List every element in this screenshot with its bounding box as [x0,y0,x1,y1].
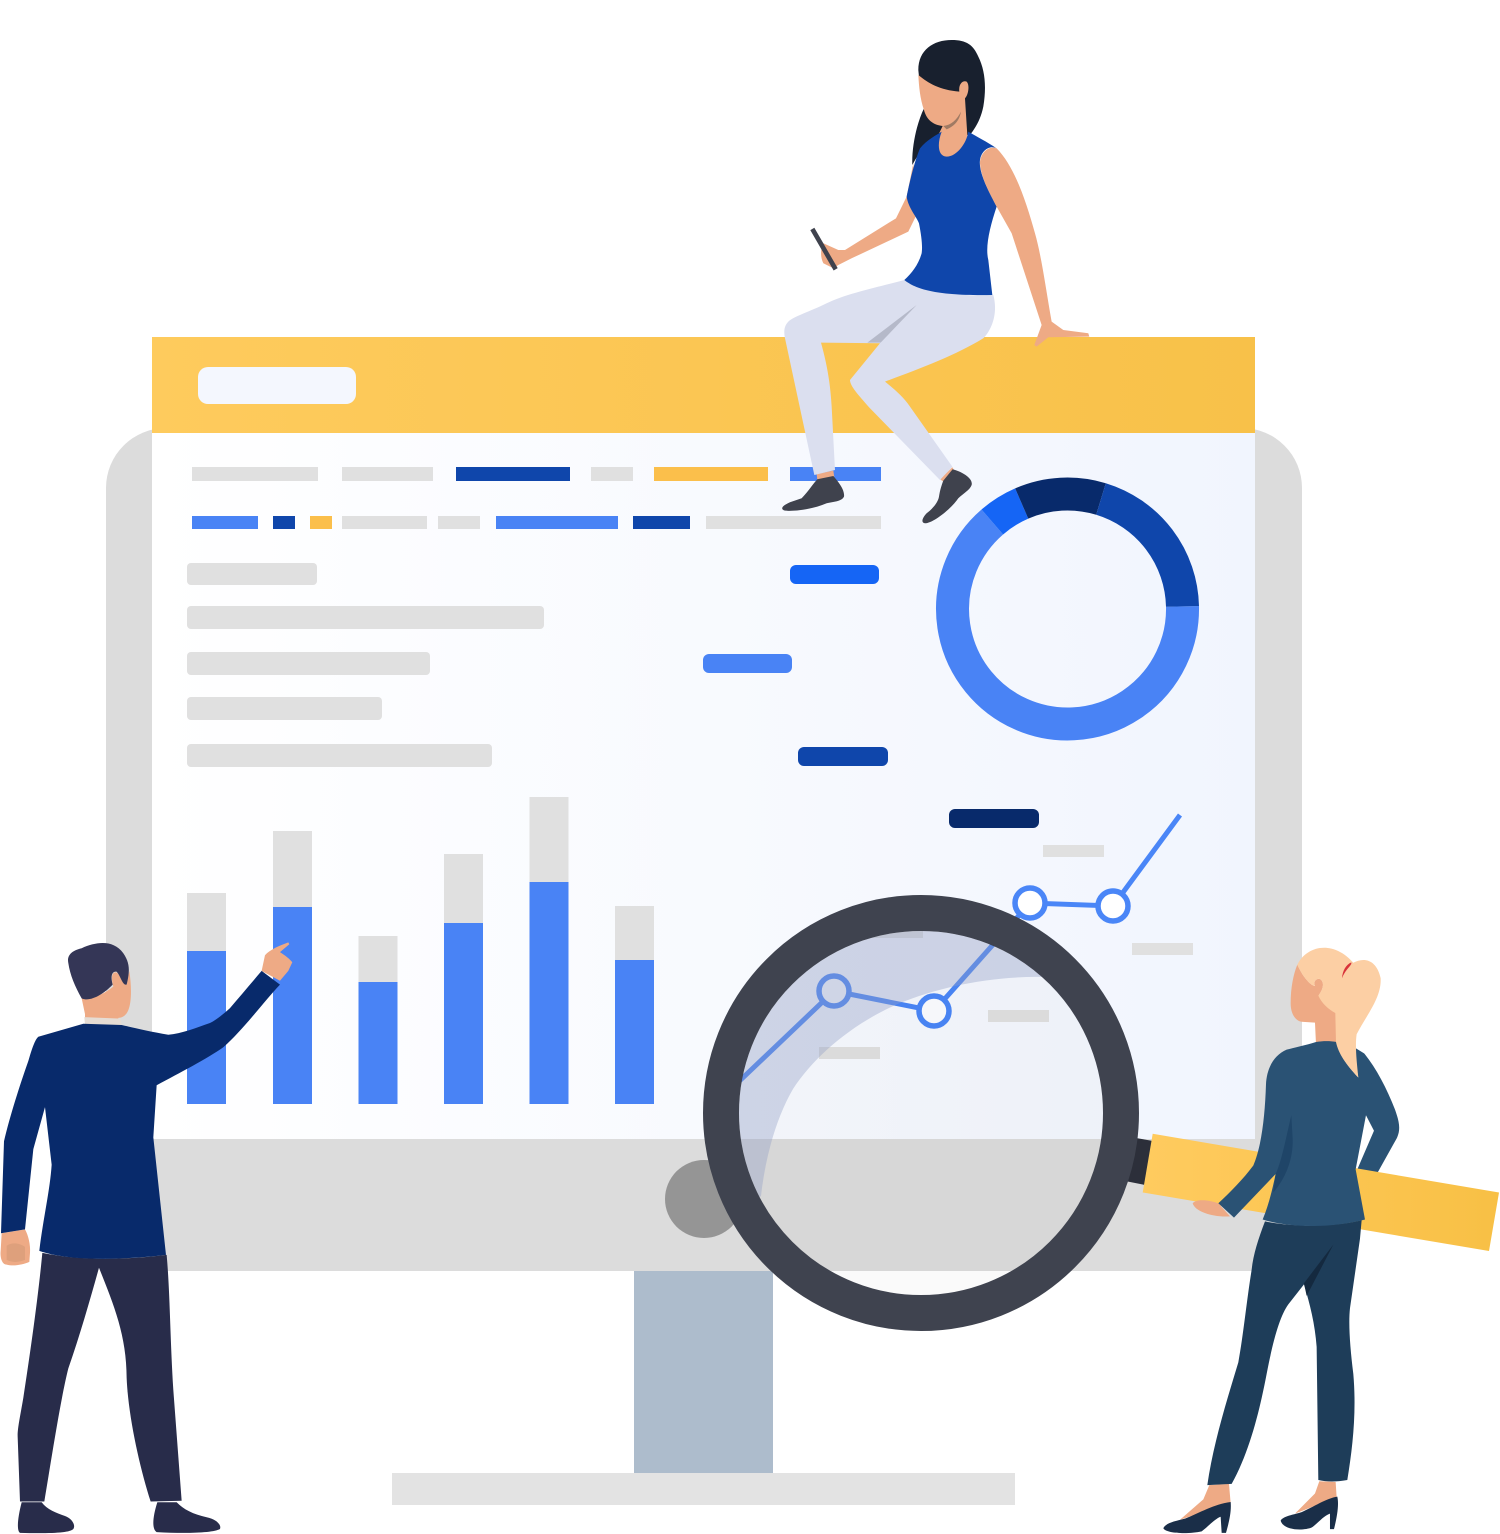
line chart [730,815,1180,1090]
monitor [106,337,1302,1505]
face and neck [1291,965,1338,1046]
trousers [784,280,995,480]
magnifier lens tint [739,931,1042,1197]
sweater [1218,1041,1372,1226]
shoes [782,469,972,523]
fist shade [7,1243,25,1262]
neck shadow [943,112,961,129]
jacket [1,971,280,1259]
hair [912,40,985,165]
handle connector [1120,1137,1153,1185]
header bar [152,337,1255,433]
tank top [904,132,997,295]
monitor bezel [106,428,1302,1271]
phone [812,229,836,269]
hair [1297,948,1381,1077]
line chart labels [819,845,1193,1059]
screen [152,433,1255,1139]
person: man pointing at chart [1,942,292,1533]
status pills [703,565,1039,828]
trousers [18,1253,182,1502]
magnifier handle [1143,1134,1499,1251]
hair tie [1342,962,1351,978]
trousers [1207,1220,1362,1485]
menu row two [192,516,881,529]
trouser shadow [1304,1245,1333,1296]
shoes [1163,1497,1338,1533]
placeholder text bars [187,563,544,767]
monitor base [392,1473,1015,1505]
shoes [18,1502,220,1533]
ankles [1180,1481,1337,1520]
hair [68,943,129,999]
sweater shade [1273,1115,1293,1192]
near arm [821,163,916,268]
bar chart [187,797,654,1104]
donut chart [953,494,1183,724]
trouser shadow [867,305,917,343]
far arm [980,148,1089,347]
monitor stand [634,1271,773,1473]
person: standing woman [1163,948,1381,1533]
power button [665,1160,743,1238]
magnifier ring [721,913,1121,1313]
collar [84,1017,122,1026]
pointing hand [262,942,292,981]
face and neck [918,75,969,160]
header search pill [198,367,356,404]
fist [1,1229,30,1265]
menu row one [192,467,881,481]
person: seated woman with phone [782,40,1089,523]
face and neck [82,971,131,1023]
ankles [817,467,954,482]
hand [1193,1200,1230,1217]
person: standing woman far arm [1357,1054,1399,1173]
